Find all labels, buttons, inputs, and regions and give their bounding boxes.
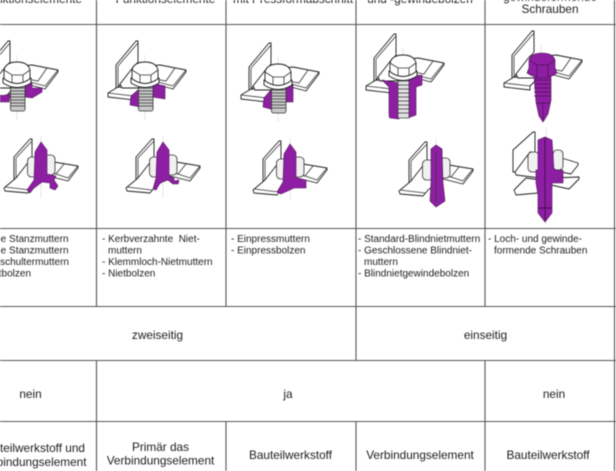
list: column 4: - Standard-Blindnietmuttern <box>358 234 480 245</box>
row: werkstoff: Verbindungselement <box>366 448 475 462</box>
list: column 3 <box>231 234 310 256</box>
row: zugänglichkeit: zweiseitig <box>132 328 183 342</box>
list: column 2: - Klemmloch-Nietmuttern <box>102 257 213 268</box>
row: werkstoff: Bauteilwerkstoff <box>249 448 333 462</box>
icon: column 3 lower fastener <box>253 138 327 200</box>
row: werkstoff: Bauteilwerkstoff <box>506 448 590 462</box>
list: column 4 <box>358 234 480 280</box>
header row: Schrauben <box>521 2 579 16</box>
row: vorloch <box>19 387 565 401</box>
list: column 4: - Blindnietgewindebolzen <box>358 268 469 280</box>
row: werkstoff <box>0 440 590 469</box>
list: column 5: - Loch- und gewinde- <box>488 234 582 245</box>
list: column 5 <box>488 234 587 256</box>
row: zugänglichkeit <box>132 328 507 342</box>
icon: column 3 upper fastener <box>241 43 319 122</box>
list: column 2: muttern <box>108 246 142 256</box>
list: column 2: - Kerbverzahnte Niet- <box>102 234 200 245</box>
list: column 4: muttern <box>364 257 398 268</box>
row: vorloch: nein <box>19 387 42 401</box>
list: column 3: - Einpressmuttern <box>231 234 310 245</box>
header row <box>0 0 597 16</box>
list: column 2 <box>102 234 213 280</box>
icon: column 1 lower fastener <box>4 136 78 198</box>
icon: column 4 upper fastener <box>366 34 444 119</box>
row: vorloch: ja <box>282 387 293 401</box>
row: zugänglichkeit: einseitig <box>464 328 507 342</box>
list: column 1 <box>0 234 69 280</box>
row: werkstoff: Primär das <box>132 440 189 454</box>
row: vorloch: nein <box>543 387 565 401</box>
list: column 5: formende Schrauben <box>494 246 587 256</box>
row: werkstoff: Verbindungselement <box>107 454 215 468</box>
icon: column 2 lower fastener <box>126 136 200 198</box>
list: column 2: - Nietbolzen <box>102 268 155 280</box>
icon: column 2 upper fastener <box>108 41 186 120</box>
list: column 4: - Geschlossene Blindniet- <box>358 246 472 256</box>
list: column 3: - Einpressbolzen <box>231 246 305 256</box>
icon: column 1 upper fastener <box>0 41 58 120</box>
icon: column 5 lower fastener <box>513 128 579 225</box>
icon: column 4 lower fastener <box>399 139 473 207</box>
icon: column 5 upper fastener <box>504 31 582 122</box>
